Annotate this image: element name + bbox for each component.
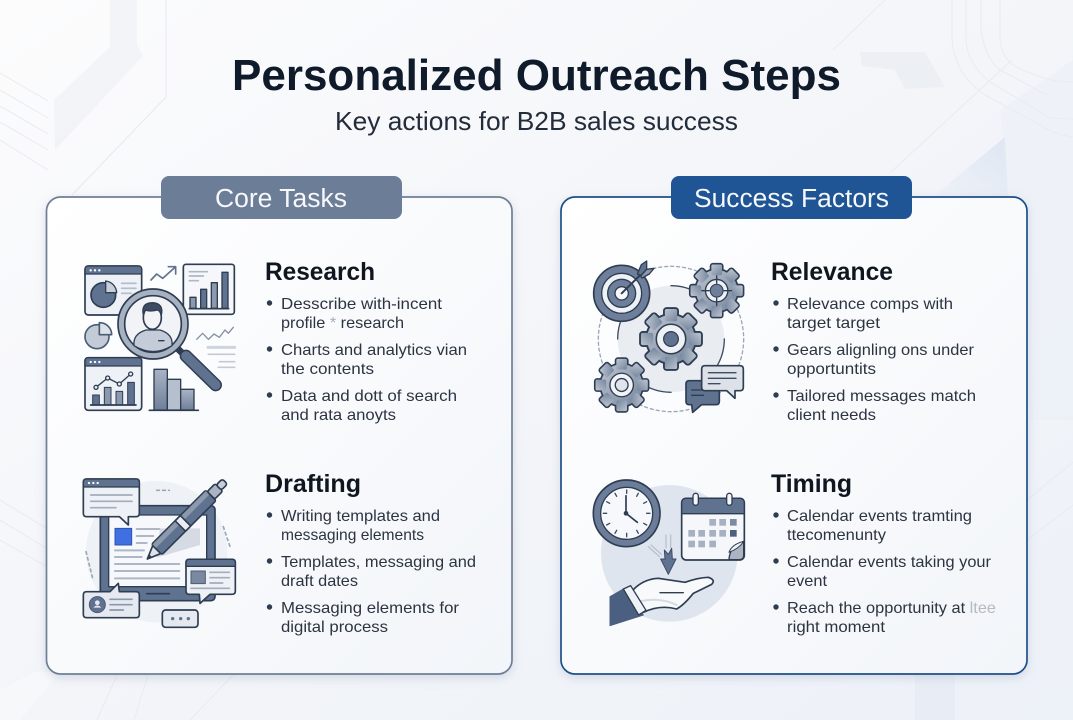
tab: core tasks: Core Tasks: [215, 185, 347, 213]
gear: bottom left: [596, 359, 648, 411]
gear: top right: [691, 265, 743, 317]
bullet list: research: Desscribe with-incent: [281, 296, 443, 313]
heading: drafting: Drafting: [265, 470, 361, 498]
heading: timing: Timing: [771, 470, 852, 498]
hand: [610, 577, 713, 626]
section: timing: [771, 470, 996, 636]
bubble: typing dots: [162, 610, 198, 627]
panel: success factors: [561, 176, 1027, 674]
blue square: [115, 528, 132, 545]
panel frame: [561, 197, 1027, 674]
icon: clock, calendar and hand: [593, 480, 744, 626]
bullet list: relevance: client needs: [787, 407, 876, 424]
bubble: right: [186, 559, 235, 603]
bullet list: drafting: messaging elements: [281, 527, 424, 544]
tab: success factors: Success Factors: [694, 185, 889, 213]
bullet list: research: profile * research: [281, 315, 404, 332]
bullet list: research: and rata anoyts: [281, 407, 396, 424]
bullet list: research: Charts and analytics vian: [281, 342, 467, 359]
panel frame: [46, 197, 512, 674]
clock: [593, 480, 660, 547]
calendar: [682, 493, 744, 560]
speech bubbles: [686, 366, 743, 412]
magnifier handle: [177, 348, 216, 385]
bullet list: timing: [773, 508, 996, 636]
bullet list: relevance: [773, 296, 976, 424]
bullet list: drafting: [267, 508, 476, 636]
heading: research: Research: [265, 258, 375, 286]
heading: relevance: Relevance: [771, 258, 893, 286]
target: [594, 261, 654, 321]
icon: drafting document with pen: [83, 476, 235, 627]
bullet list: relevance: Gears alignling ons under: [787, 342, 975, 359]
tab: core tasks: [161, 176, 402, 219]
magnifier lens with person: [118, 289, 188, 359]
bullet list: drafting: Messaging elements for: [281, 600, 460, 617]
section: relevance: [771, 258, 976, 424]
bullet list: drafting: digital process: [281, 619, 388, 636]
section: drafting: [265, 470, 476, 636]
bullet list: research: [267, 296, 467, 424]
bubble: profile: [83, 583, 139, 618]
bullet list: timing: right moment: [787, 619, 886, 636]
bubble: top left: [83, 479, 139, 525]
bullet list: timing: Reach the opportunity at ltee: [787, 600, 996, 617]
bullet list: drafting: Templates, messaging and: [281, 554, 476, 571]
arrow down: [648, 535, 676, 574]
title: Personalized Outreach Steps: [232, 51, 841, 100]
subtitle: Key actions for B2B sales success: [335, 106, 738, 136]
bullet list: timing: Calendar events taking your: [787, 554, 992, 571]
bullet list: relevance: target target: [787, 315, 881, 332]
panel: core tasks: [46, 176, 512, 674]
bullet list: research: the contents: [281, 361, 374, 378]
bullet list: relevance: Relevance comps with: [787, 296, 953, 313]
bullet list: timing: Calendar events tramting: [787, 508, 972, 525]
gear: center: [641, 309, 701, 369]
section: research: [265, 258, 467, 424]
pen: [142, 476, 230, 564]
icon: research analytics with magnifier: [85, 264, 235, 410]
bullet list: drafting: draft dates: [281, 573, 358, 590]
bullet list: timing: ttecomenunty: [787, 527, 886, 544]
tab: success factors: [671, 176, 912, 219]
bullet list: drafting: Writing templates and: [281, 508, 440, 525]
bullet list: research: Data and dott of search: [281, 388, 457, 405]
bullet list: relevance: opportuntits: [787, 361, 876, 378]
bullet list: timing: event: [787, 573, 828, 590]
bullet list: relevance: Tailored messages match: [787, 388, 976, 405]
icon: target and gears: [594, 261, 744, 412]
